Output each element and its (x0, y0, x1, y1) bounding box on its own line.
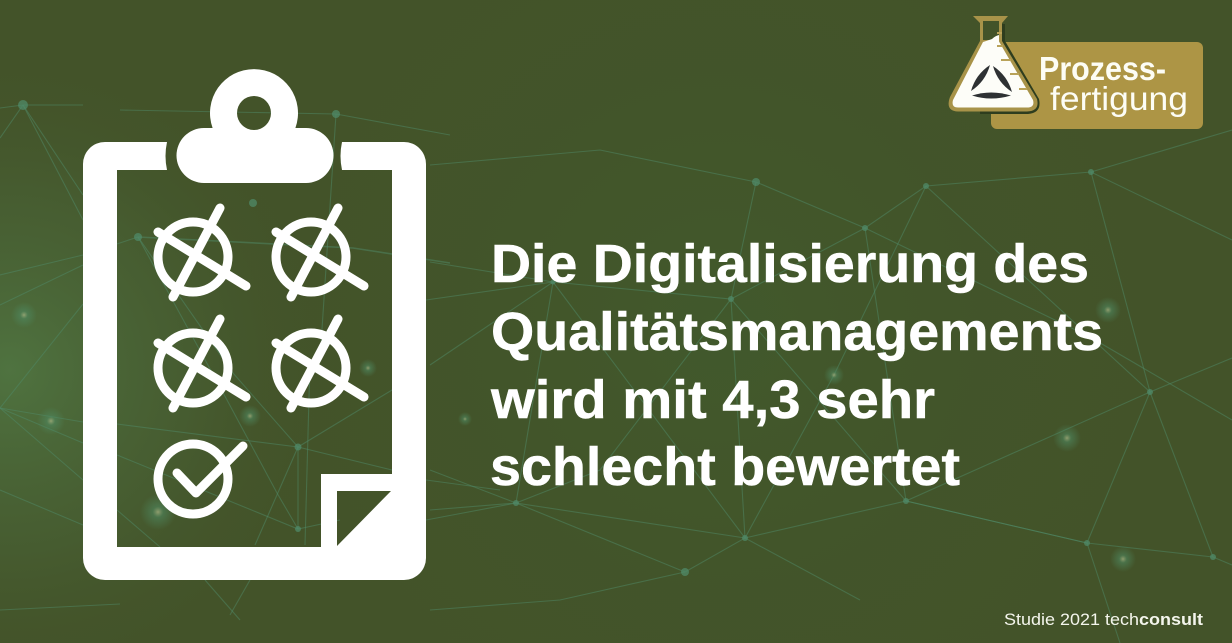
headline (490, 234, 1103, 497)
crossed circle row 2 left (158, 319, 246, 408)
crossed circle row 1 right (276, 208, 364, 297)
checked circle (158, 444, 243, 514)
headline: Die Digitalisierung des (491, 234, 1089, 294)
icon: clipboard (83, 69, 426, 580)
clipboard clip (176, 69, 334, 183)
glowing lights (11, 297, 1136, 572)
clipboard frame with folded page corner (83, 142, 426, 580)
badge text: fertigung (1050, 80, 1188, 117)
crossed circle row 1 left (158, 208, 246, 297)
flask logo triangle (971, 65, 1012, 98)
headline: wird mit 4,3 sehr (490, 370, 935, 430)
source note: Studie 2021 tech consult (1004, 610, 1203, 629)
badge text (1039, 50, 1188, 117)
flask graduation ticks (997, 33, 1027, 89)
headline: schlecht bewertet (490, 437, 960, 497)
gold label panel (991, 42, 1203, 129)
headline: Qualitätsmanagements (491, 302, 1103, 362)
icon: flask (949, 16, 1040, 114)
crossed circle row 2 right (276, 319, 364, 408)
badge: Prozessfertigung (949, 16, 1203, 129)
badge text: Prozess- (1039, 50, 1166, 87)
network nodes (18, 100, 1216, 576)
